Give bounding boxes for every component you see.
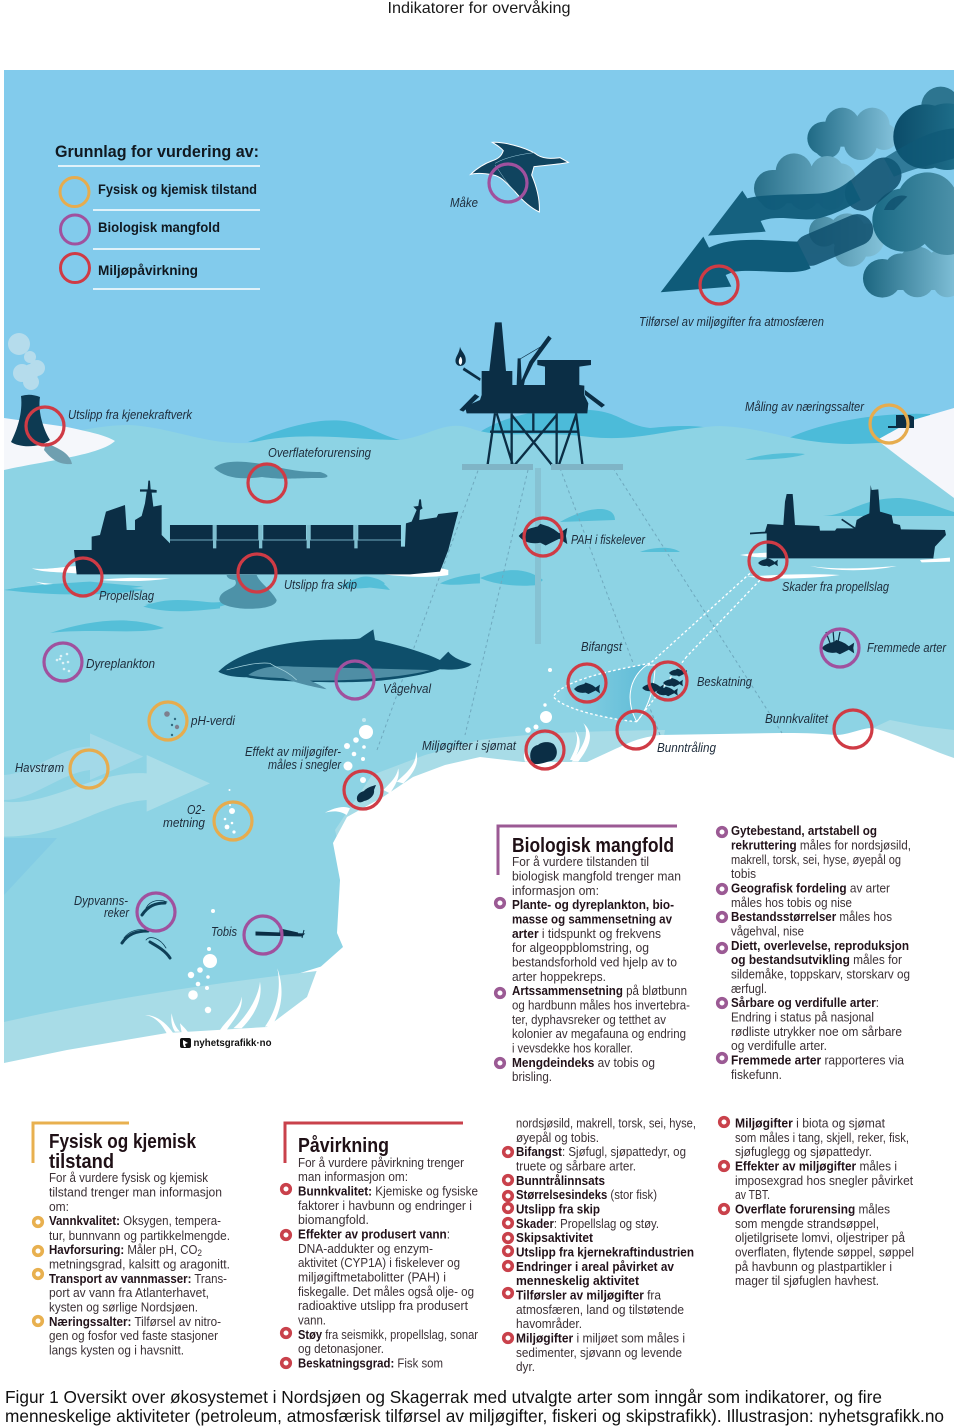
text column 1: brisling.	[512, 1070, 552, 1084]
icon: bottom bubbles	[188, 909, 217, 1013]
icon: invasive fish	[822, 630, 854, 654]
text column 2: Fremmede arter rapporteres via	[731, 1054, 904, 1068]
horizon waves	[248, 409, 930, 445]
platform legs	[487, 413, 583, 467]
map labels: Måke	[450, 196, 478, 210]
panel: ecosystem map	[4, 70, 960, 1075]
sky background	[4, 70, 954, 444]
bullets	[282, 1118, 728, 1367]
map labels: måles i snegler	[268, 758, 342, 772]
oil platform	[456, 322, 605, 467]
icon: harvested fish	[642, 668, 687, 696]
text column 2: truete og sårbare arter.	[516, 1160, 636, 1174]
surface water patches	[5, 453, 954, 633]
text column 1: kolonier av megafauna og endring	[512, 1027, 686, 1041]
dashed lines from platform	[377, 465, 782, 750]
text column 3: Miljøgifter i biota og sjømat	[735, 1116, 886, 1130]
body text: kysten og sørlige Nordsjøen.	[49, 1300, 198, 1314]
arrow: upper	[708, 180, 861, 236]
vertical platform pole	[535, 468, 541, 644]
icon: sand eel	[256, 929, 304, 938]
seaweed near snail	[325, 752, 417, 815]
text column 2: sedimenter, sjøvann og levende	[516, 1346, 682, 1360]
text column 2: måles hos tobis og nise	[731, 896, 852, 910]
icon: bubbles above snail	[344, 718, 373, 783]
text column 1: For å vurdere tilstanden til	[512, 855, 649, 869]
text column 3: på havbunn og plastpartikler i	[735, 1260, 892, 1274]
legend heading: Grunnlag for vurdering av:	[55, 142, 259, 161]
text column 1: Effekter av produsert vann:	[298, 1228, 450, 1242]
heading second line: tilstand	[49, 1151, 114, 1173]
text column 2: Skader: Propellslag og støy.	[516, 1217, 659, 1231]
sea body	[4, 425, 954, 1065]
map labels: Bunnkvalitet	[765, 712, 828, 726]
text column 2: havområder.	[516, 1317, 582, 1331]
text column 1: for algeoppblomstring, og	[512, 941, 649, 955]
legend item: biodiversity: Biologisk mangfold	[98, 220, 220, 235]
icon: current arrows	[4, 733, 210, 837]
shoreline band	[4, 720, 954, 1070]
text column 3: sjøfuglegg og sjøpattedyr.	[735, 1145, 872, 1159]
map labels	[15, 196, 947, 939]
text column 2: Sårbare og verdifulle arter:	[731, 996, 879, 1010]
text column 2: Geografisk fordeling av arter	[731, 882, 890, 896]
text column 2: Utslipp fra kjernekraftindustrien	[516, 1246, 694, 1260]
text column 2: nordsjøsild, makrell, torsk, sei, hyse,	[516, 1116, 696, 1130]
left shore with power plant	[4, 418, 115, 470]
purple indicator rings	[44, 164, 859, 954]
icon: bubbles above shellfish	[525, 668, 552, 733]
icon: shellfish	[530, 742, 557, 764]
right shore	[877, 408, 954, 498]
text column 2: Endring i status på nasjonal	[731, 1010, 874, 1024]
map labels: Vågehval	[383, 682, 432, 696]
container ship	[4, 481, 480, 611]
legend item: environmental impact: Miljøpåvirkning	[98, 263, 198, 278]
map labels: Overflateforurensing	[268, 446, 371, 460]
map labels: O2-	[187, 803, 205, 817]
icon: gull	[471, 142, 568, 212]
cloud: large mid right	[872, 172, 960, 255]
red indicator rings	[26, 266, 872, 809]
heading bracket	[33, 1123, 129, 1163]
text column 1: man informasjon om:	[298, 1170, 408, 1184]
text column 1: Støy fra seismikk, propellslag, sonar	[298, 1328, 478, 1342]
map labels: Dyreplankton	[86, 657, 155, 671]
text column 3: av TBT.	[735, 1188, 770, 1202]
ship discharge	[219, 575, 277, 609]
text column 1: biologisk mangfold trenger man	[512, 870, 681, 884]
text column 2: Diett, overlevelse, reproduksjon	[731, 939, 909, 953]
text column 1: masse og sammensetning av	[512, 912, 672, 926]
text column 2: sildemåke, toppskarv, storskarv og	[731, 968, 910, 982]
text column 3: Overflate forurensing måles	[735, 1202, 890, 1216]
seabed	[4, 728, 954, 1075]
text column 1: miljøgiftmetabolitter (PAH) i	[298, 1270, 446, 1284]
text column 2: Bunntrålinnsats	[516, 1174, 605, 1188]
icon: cooling tower and smoke	[8, 333, 72, 464]
legend item: environmental impact	[60, 254, 198, 282]
icon: plankton dots	[56, 653, 70, 672]
oil slick	[214, 462, 328, 479]
text column 3: imposexgrad hos snegler påvirket	[735, 1174, 913, 1188]
text column 3: oljetilgrisete lomvi, oljestriper på	[735, 1231, 905, 1245]
body text: gen og fosfor ved faste stasjoner	[49, 1329, 218, 1343]
map labels: metning	[163, 816, 205, 830]
icon: oxygen bubbles	[224, 789, 236, 834]
cloud: lower middle	[809, 213, 884, 267]
text column 2: Miljøgifter i miljøet som måles i	[516, 1332, 685, 1346]
text column 2: vågehval, nise	[731, 924, 804, 938]
bullets	[496, 828, 726, 1067]
text column 1: For å vurdere påvirkning trenger	[298, 1156, 464, 1170]
text column 3	[735, 1116, 914, 1288]
text column 2: Utslipp fra skip	[516, 1202, 600, 1216]
logo: nyhetsgrafikk: nyhetsgrafikk·no	[194, 1038, 272, 1049]
seaweed near shellfish	[524, 723, 590, 762]
text column 1: ter, dyphavsreker og tetthet av	[512, 1013, 667, 1027]
text column 1: Mengdeindeks av tobis og	[512, 1056, 655, 1070]
trawl catch zone	[553, 573, 763, 722]
body text: tur, bunnvann og partikkelmengde.	[49, 1229, 230, 1243]
text column 1: fiskegalle. Det måles også olje- og	[298, 1285, 474, 1299]
text column 2: Bifangst: Sjøfugl, sjøpattedyr, og	[516, 1145, 686, 1159]
map labels: Beskatning	[697, 675, 752, 689]
page title: Indikatorer for overvåking	[388, 0, 570, 17]
legend item: biodiversity	[60, 215, 220, 244]
cloud: large dark top	[893, 103, 960, 170]
panel: impact	[282, 1116, 914, 1374]
heading: Påvirkning	[298, 1134, 389, 1157]
text column 1: arter hoppekreps.	[512, 970, 606, 984]
map labels: Bifangst	[581, 640, 622, 654]
cloud: middle left	[754, 153, 856, 197]
body text: 2	[197, 1248, 202, 1258]
text column 1: biomangfold.	[298, 1213, 369, 1227]
text column 2: ærfugl.	[731, 982, 767, 996]
orange indicator rings	[70, 405, 908, 840]
map labels: reker	[104, 906, 130, 920]
cloud: top	[807, 108, 897, 160]
text column 2: øyepål og tobis.	[516, 1131, 599, 1145]
map labels: Utslipp fra kjenekraftverk	[68, 408, 193, 422]
arrow: lower	[661, 237, 811, 292]
figure caption: Figur 1 Oversikt over økosystemet i Nordsjøen og Skagerrak med utvalgte arter som inngår som indikatorer, og fire	[5, 1387, 882, 1407]
text column 2	[516, 1116, 696, 1374]
text column 1: arter i tidspunkt og frekvens	[512, 927, 661, 941]
map labels: Fremmede arter	[867, 641, 947, 655]
map labels: Miljøgifter i sjømat	[422, 739, 516, 753]
map labels: Havstrøm	[15, 761, 64, 775]
seaweed at bottom	[145, 968, 282, 1033]
text column 3: overflaten, flytende søppel, søppel	[735, 1246, 914, 1260]
text column 2: rekruttering måles for nordsjøsild,	[731, 838, 911, 852]
text column 1: bestandsforhold ved hjelp av to	[512, 956, 677, 970]
text column 1: vann.	[298, 1314, 326, 1328]
map labels: pH-verdi	[190, 714, 236, 728]
body text: tilstand trenger man informasjon	[49, 1186, 222, 1200]
text column 3: Effekter av miljøgifter måles i	[735, 1160, 897, 1174]
text column 2: makrell, torsk, sei, hyse, øyepål og	[731, 853, 901, 867]
text column 1: Artssammensetning på bløtbunn	[512, 984, 687, 998]
icon: fish in PAH circle	[519, 524, 567, 545]
body text: Vannkvalitet: Oksygen, tempera-	[49, 1214, 221, 1228]
map labels: Effekt av miljøgifer-	[245, 745, 341, 759]
heading: Fysisk og kjemisk	[49, 1131, 197, 1153]
text column 1: faktorer i havbunn og endringer i	[298, 1199, 472, 1213]
clouds and pollution arrows	[661, 87, 960, 298]
map labels: Måling av næringssalter	[745, 400, 865, 414]
text column 1	[298, 1156, 478, 1370]
text column 1: og detonasjoner.	[298, 1342, 384, 1356]
map labels: Bunntråling	[657, 741, 716, 755]
map labels: Tobis	[211, 925, 237, 939]
icon: nutrient sensor	[888, 415, 914, 428]
map labels: Skader fra propellslag	[782, 580, 889, 594]
map labels: Propellslag	[99, 589, 154, 603]
text column 1	[512, 855, 690, 1084]
text column 1: aktivitet (CYP1A) i fiskelever og	[298, 1256, 460, 1270]
figure caption: menneskelige aktiviteter (petroleum, atmosfærisk tilførsel av miljøgifter, fiskeri og skipstrafikk). Illustrasjon: nyhetsgrafikk.no	[5, 1406, 944, 1426]
platform base	[462, 464, 623, 470]
text column 2: Størrelsesindeks (stor fisk)	[516, 1188, 657, 1202]
text column 2	[731, 824, 911, 1082]
smoke bands	[811, 175, 884, 250]
body text: metningsgrad, kalsitt og aragonitt.	[49, 1258, 230, 1272]
bullets	[34, 1218, 42, 1325]
text column 2: og verdifulle arter.	[731, 1039, 827, 1053]
whale	[218, 629, 472, 689]
text column 1: i vevsdekke hos koraller.	[512, 1042, 633, 1056]
text column 1: informasjon om:	[512, 884, 599, 898]
text column 3: mager til sjøfuglen havhest.	[735, 1274, 879, 1288]
text column 1: Beskatningsgrad: Fisk som	[298, 1356, 443, 1370]
body text: langs kysten og i havsnitt.	[49, 1344, 184, 1358]
body text	[49, 1171, 230, 1358]
body text: Havforsuring: Måler pH, CO	[49, 1243, 204, 1257]
text column 2: menneskelig aktivitet	[516, 1274, 640, 1288]
icon: snail	[357, 785, 376, 802]
text column 1: Plante- og dyreplankton, bio-	[512, 898, 674, 912]
text column 2: Endringer i areal påvirket av	[516, 1260, 674, 1274]
icon: flare	[456, 347, 481, 381]
text column 2: Bestandsstørrelser måles hos	[731, 910, 892, 924]
body text: Transport av vannmasser: Trans-	[49, 1272, 227, 1286]
body text: For å vurdere fysisk og kjemisk	[49, 1171, 209, 1185]
legend item: physical and chemical state: Fysisk og kjemisk tilstand	[98, 182, 257, 197]
heading bracket	[285, 1123, 463, 1163]
text column 2: og bestandsutvikling måles for	[731, 953, 902, 967]
map labels: Tilførsel av miljøgifter fra atmosfæren	[639, 315, 824, 329]
text column 2: Gytebestand, artstabell og	[731, 824, 877, 838]
icon: pH particles	[164, 711, 179, 736]
text column 1: DNA-addukter og enzym-	[298, 1242, 433, 1256]
ship wake	[32, 566, 448, 584]
panel: physical and chemical state	[33, 1123, 230, 1358]
panel: biological diversity	[496, 824, 911, 1084]
cloud: bottom right	[863, 247, 960, 298]
map labels: Utslipp fra skip	[284, 578, 357, 592]
body text: Næringssalter: Tilførsel av nitro-	[49, 1315, 221, 1329]
heading: Biologisk mangfold	[512, 835, 674, 857]
text column 2: dyr.	[516, 1360, 535, 1374]
text column 3: som mengde strandsøppel,	[735, 1217, 879, 1231]
text column 2: Skipsaktivitet	[516, 1231, 594, 1245]
cloud: top right behind	[921, 86, 954, 106]
text column 2: rødliste utrykker noe om sårbare	[731, 1025, 902, 1039]
heading bracket	[498, 826, 677, 875]
text column 2: atmosfæren, land og tilstøtende	[516, 1303, 684, 1317]
figure caption	[5, 1387, 944, 1426]
icon: bycatch fish	[574, 683, 600, 694]
map labels: Dypvanns-	[74, 894, 128, 908]
body text: om:	[49, 1200, 69, 1214]
body text: port av vann fra Atlanterhavet,	[49, 1286, 209, 1300]
text column 3: som måles i tang, skjell, reker, fisk,	[735, 1131, 909, 1145]
text column 2: fiskefunn.	[731, 1068, 782, 1082]
text column 2: Tilførsler av miljøgifter fra	[516, 1288, 661, 1302]
legend item: physical and chemical state	[60, 178, 257, 206]
text column 2: tobis	[731, 867, 756, 881]
icon: shrimp group	[122, 900, 170, 958]
text column 1: radioaktive utslipp fra produsert	[298, 1299, 469, 1313]
research vessel	[740, 485, 950, 578]
icon: fish at propeller	[758, 558, 778, 567]
text column 1: og hardbunn måles hos invertebra-	[512, 998, 690, 1012]
legend: basis for assessment	[55, 142, 260, 289]
lower water tone	[4, 838, 57, 895]
map labels: PAH i fiskelever	[571, 533, 646, 547]
text column 1: Bunnkvalitet: Kjemiske og fysiske	[298, 1184, 478, 1198]
